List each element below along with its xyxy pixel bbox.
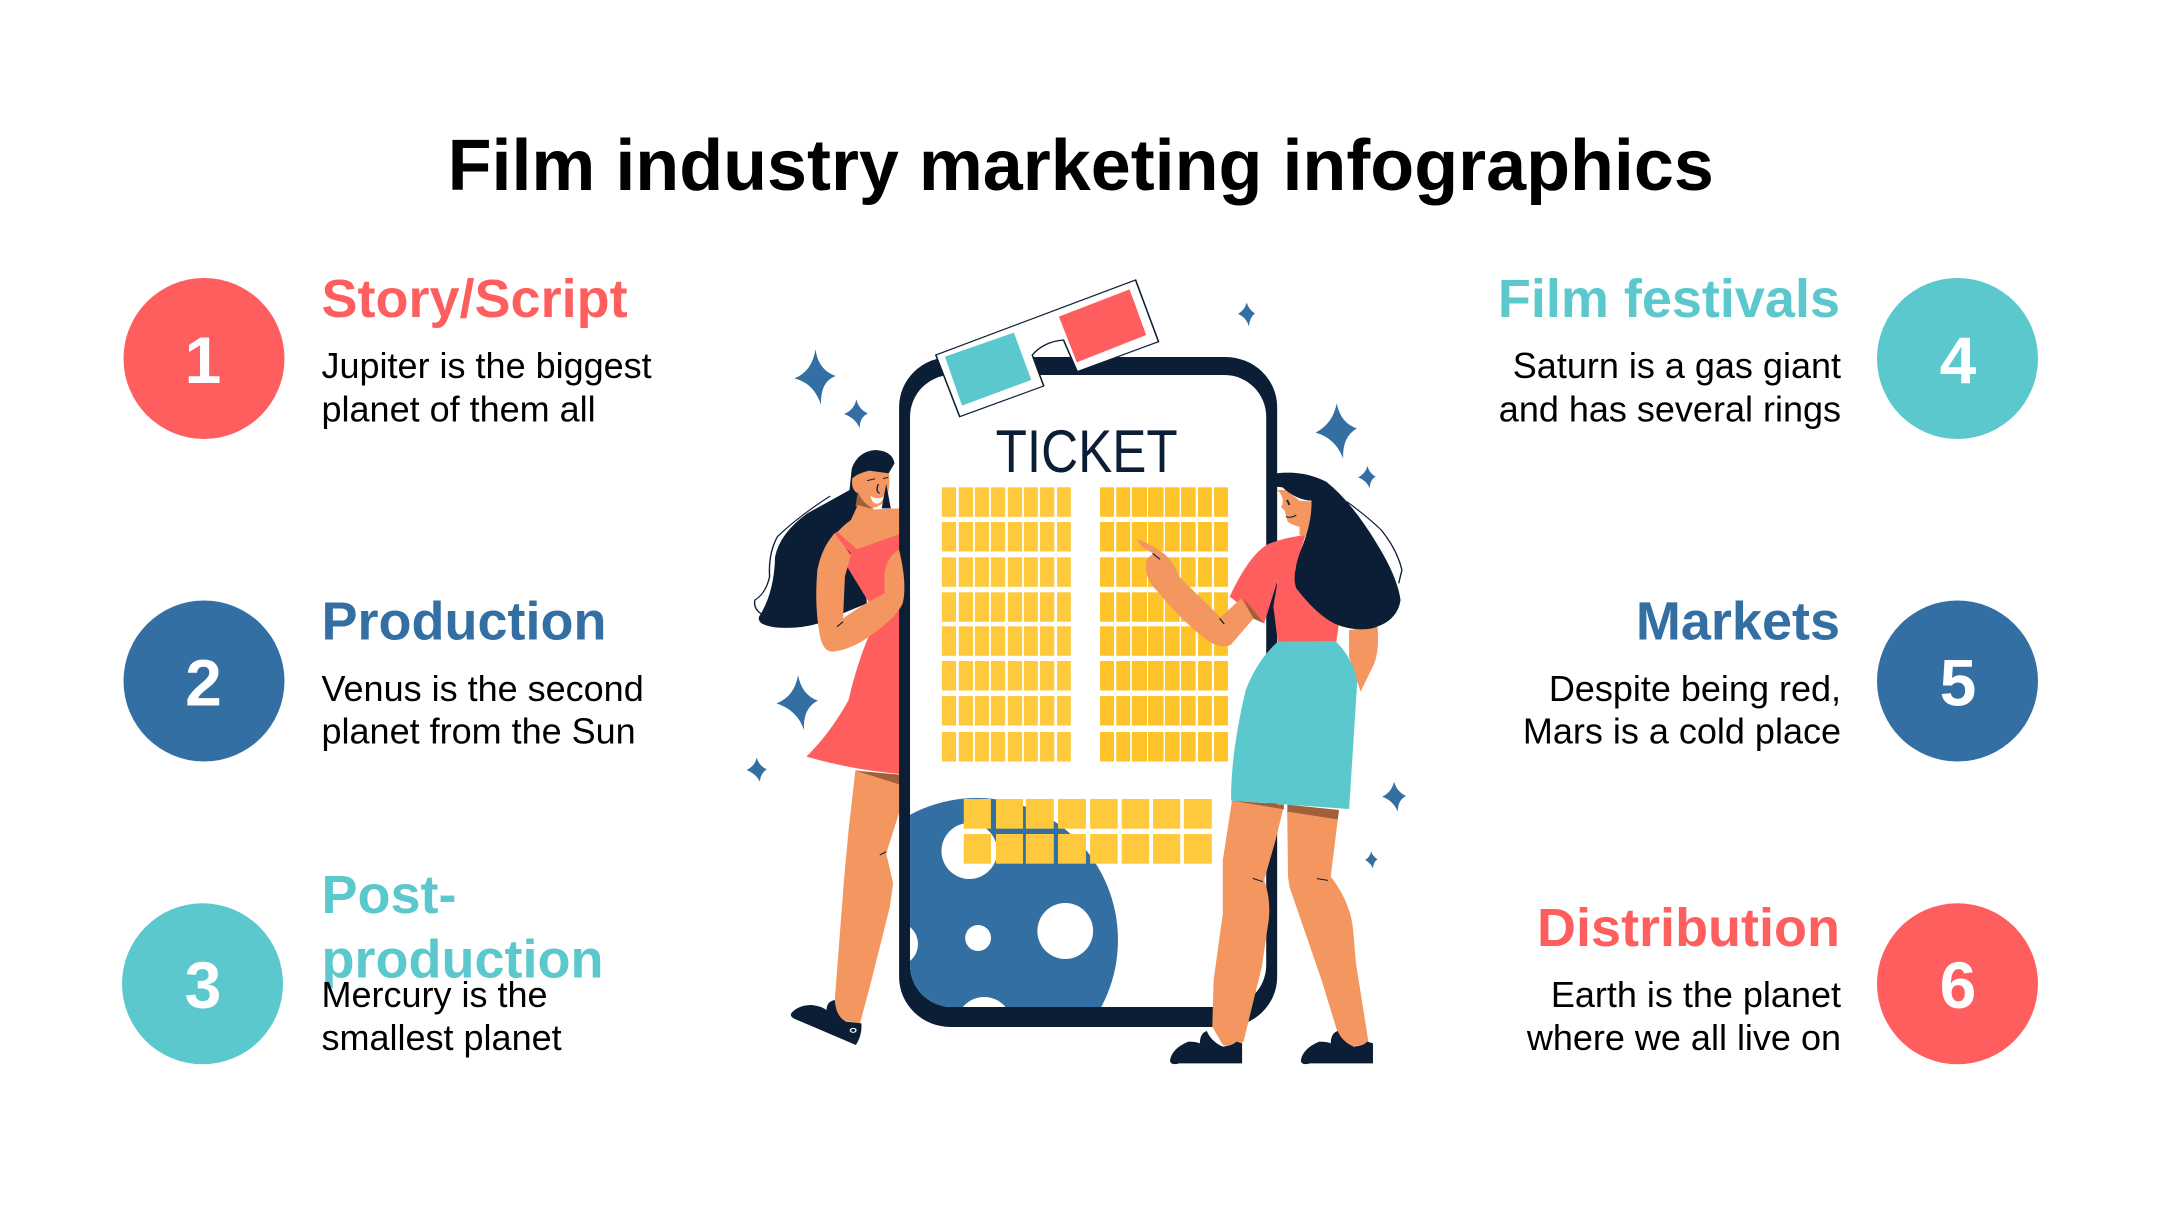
number badge 5: 5: [1940, 646, 1976, 720]
number badge 1: [124, 278, 284, 439]
panel: item 4 film festivals: [1498, 269, 2038, 439]
heading: Story/Script: Story/Script: [322, 269, 628, 329]
panel: item 2 production: [124, 592, 644, 762]
phone frame: [899, 357, 1277, 1027]
seats: bottom block: [964, 799, 1212, 864]
text: Earth: Earth is the planet: [1551, 974, 1841, 1015]
number badge 4: [1877, 278, 2038, 439]
text: Venus: planet from the Sun: [322, 710, 636, 752]
text: Saturn: Saturn is a gas giant: [1513, 345, 1841, 386]
left woman folded arm: [816, 533, 904, 652]
planet: [910, 798, 1118, 1007]
text: Mercury: smallest planet: [322, 1017, 562, 1058]
heading: Film festivals: Film festivals: [1498, 269, 1840, 329]
icon: 3D glasses: [936, 280, 1159, 417]
panel: item 6 distribution: [1526, 898, 2038, 1064]
text: Mercury: Mercury is the: [322, 974, 548, 1015]
seats: right block: [1100, 487, 1228, 762]
number badge 6: 6: [1940, 948, 1976, 1022]
heading: Post-production: Post-: [322, 865, 456, 925]
heading: Post-production: production: [322, 930, 603, 990]
number badge 3: 3: [185, 948, 221, 1022]
panel: item 5 markets: [1523, 592, 2038, 762]
title: Film industry marketing infographics: [448, 126, 1714, 206]
number badge 4: 4: [1940, 323, 1977, 397]
heading: Distribution: Distribution: [1537, 898, 1840, 958]
text: Jupiter: Jupiter is the biggest: [322, 345, 652, 386]
left woman arm crease: [837, 622, 843, 627]
left woman body behind phone: [755, 450, 900, 1045]
text: Venus: Venus is the second: [322, 668, 644, 709]
seats: left block: [942, 487, 1071, 762]
icons: sparkle stars: [747, 303, 1406, 868]
phone, planet, label and seats: [899, 357, 1278, 1027]
number badge 3: [122, 903, 283, 1064]
panel: item 1 story/script: [124, 269, 652, 439]
panel: item 3 post-production: [122, 865, 603, 1064]
number badge 2: 2: [185, 646, 222, 720]
number badge 1: 1: [185, 323, 221, 397]
text: Jupiter: planet of them all: [322, 388, 596, 430]
heading: Production: Production: [322, 592, 606, 652]
overlay drawing in reference coordinates: [747, 280, 1406, 1064]
number badge 2: [124, 600, 284, 762]
heading: Markets: Markets: [1636, 592, 1840, 652]
text: Saturn: and has several rings: [1499, 388, 1841, 430]
number badge 6: [1877, 903, 2038, 1064]
text: Mars: Despite being red,: [1549, 668, 1841, 709]
text: Mars: Mars is a cold place: [1523, 710, 1841, 752]
right woman: [1137, 473, 1402, 1064]
text: Earth: where we all live on: [1526, 1017, 1841, 1058]
illustration: ticket phone with two women: [747, 280, 1406, 1082]
ticket label: TICKET: [996, 418, 1178, 485]
number badge 5: [1877, 600, 2038, 762]
